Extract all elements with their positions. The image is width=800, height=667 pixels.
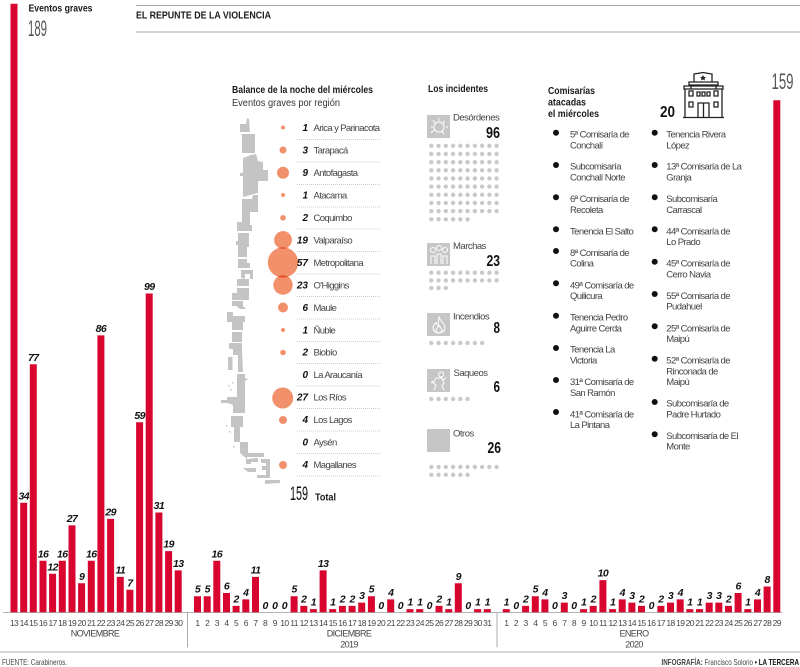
bars: diciembre: 1: [485, 597, 491, 609]
list column 1: San Ramón: [570, 388, 615, 399]
bars: noviembre: 18: [58, 618, 67, 628]
bars: diciembre: 6: [224, 580, 230, 592]
bars: diciembre: 0: [465, 600, 471, 612]
bars: diciembre: 31: [483, 618, 492, 628]
bars: enero: 9: [582, 618, 587, 628]
list column 2: Subcomisaría de El: [666, 431, 738, 442]
list column 2: Carrascal: [666, 205, 702, 216]
incident: marchas: 23: [486, 253, 500, 270]
bars: diciembre: 2: [205, 618, 210, 628]
bars: noviembre: 34: [18, 490, 30, 502]
bars: noviembre: 22: [97, 618, 106, 628]
incident: otros: 26: [488, 440, 501, 457]
list column 2: 25ª Comisaría de: [666, 323, 730, 334]
list column 1: Colina: [570, 259, 595, 270]
bars: enero: 1: [581, 597, 587, 609]
list column 1: Recoleta: [570, 205, 604, 216]
bars: noviembre: 11: [115, 564, 126, 576]
list column 1: Tenencia La: [570, 345, 616, 356]
incident: otros: Otros: [453, 428, 474, 440]
bars: enero: 0: [571, 600, 577, 612]
list column 1: Aguirre Cerda: [570, 323, 623, 334]
list column 2: 13ª Comisaría de La: [666, 162, 743, 173]
bars: enero: 10: [589, 618, 598, 628]
bars: diciembre: 14: [319, 618, 328, 628]
bars: diciembre: 10: [280, 618, 289, 628]
bars: diciembre: 9: [456, 571, 462, 583]
bars: enero: 5: [533, 584, 539, 596]
list column 2: Rinconada de: [666, 366, 718, 377]
bars: noviembre: 16: [86, 548, 97, 560]
list column 1: Quilicura: [570, 291, 603, 302]
bars: diciembre: 11: [251, 564, 261, 576]
bars: noviembre: 27: [66, 513, 79, 525]
bars: noviembre: 17: [48, 618, 58, 628]
bars: noviembre: 12: [47, 561, 59, 573]
bars: enero: 18: [666, 618, 675, 628]
bars: noviembre: 16: [38, 548, 49, 560]
bars: enero: 23: [715, 618, 724, 628]
list column 1: 31ª Comisaría de: [570, 377, 634, 388]
region list: 1: [302, 123, 308, 134]
bars: diciembre: 30: [473, 618, 483, 628]
list column 1: Conchalí Norte: [570, 173, 625, 184]
chart heading: eventos graves: Eventos graves: [28, 4, 93, 14]
list column 2: Monte: [666, 442, 690, 453]
region list: 4: [301, 415, 308, 426]
bars: diciembre: 9: [273, 618, 278, 628]
region list: 0: [302, 370, 308, 381]
bars: noviembre: 77: [28, 352, 40, 364]
bars: enero: 2: [590, 593, 597, 605]
incident: desórdenes: 96: [486, 125, 500, 142]
bars: noviembre: 16: [39, 618, 48, 628]
region list: 1: [302, 190, 308, 202]
comisarías heading: el miércoles: [548, 109, 599, 120]
incident: saqueos: 6: [494, 379, 500, 396]
bars: enero: 2: [657, 593, 664, 605]
list column 1: 5ª Comisaría de: [570, 129, 629, 140]
list column 1: Tenencia Pedro: [570, 312, 628, 323]
list column 2: Padre Hurtado: [666, 409, 721, 420]
bars: noviembre: 7: [127, 577, 134, 589]
bars: diciembre: 1: [407, 597, 413, 609]
bars: enero: 1: [504, 597, 510, 609]
bars: noviembre: 99: [144, 281, 155, 293]
region list: Metropolitana: [314, 258, 364, 269]
bars: enero: 20: [686, 618, 695, 628]
bars: noviembre: 20: [77, 618, 87, 628]
bars: noviembre: 19: [68, 618, 77, 628]
bars: noviembre: 27: [145, 618, 154, 628]
map of Chile: [221, 118, 280, 484]
incidents heading: Los incidentes: [428, 84, 488, 95]
incident: marchas: Marchas: [453, 241, 487, 252]
bars: enero: 1: [687, 597, 693, 609]
bars: noviembre: 9: [79, 571, 85, 583]
region list: O'Higgins: [314, 280, 350, 292]
bars: diciembre: 0: [262, 600, 268, 612]
panel: balance by region: [221, 85, 381, 505]
bars: enero: 4: [754, 587, 761, 599]
bars: diciembre: 5: [205, 584, 211, 596]
bars: noviembre: 29: [164, 618, 174, 628]
bars: diciembre: 15: [329, 618, 338, 628]
bars: noviembre: 31: [154, 500, 165, 512]
bars: enero: 3: [668, 590, 674, 602]
bars: noviembre: 86: [96, 323, 107, 335]
balance heading: Balance de la noche del miércoles: [232, 85, 373, 96]
list column 2: Maipú: [666, 377, 689, 388]
bars: diciembre: 0: [398, 600, 404, 612]
list column 2: Cerro Navia: [666, 269, 712, 280]
bars: diciembre: 6: [244, 618, 249, 628]
list column 2: 55ª Comisaría de: [666, 291, 730, 302]
bullets column 2: [652, 130, 658, 437]
region list: 1: [302, 326, 308, 336]
incident: saqueos: [427, 368, 500, 399]
list column 1: 6ª Comisaría de: [570, 194, 629, 205]
bars: diciembre: 24: [416, 618, 425, 628]
bars: noviembre: 13: [10, 618, 19, 628]
panel: los incidentes: [427, 84, 501, 475]
region list: Ñuble: [314, 326, 336, 336]
total: Total: [315, 492, 336, 504]
bars: noviembre: 28: [155, 618, 164, 628]
incident: incendios: [427, 312, 500, 343]
bars: diciembre: 1: [195, 618, 200, 628]
bars: diciembre: 23: [406, 618, 415, 628]
bars: enero: 4: [677, 587, 684, 599]
list column 1: 49ª Comisaría de: [570, 280, 634, 291]
bars: diciembre: 4: [242, 587, 249, 599]
bars: noviembre: 23: [106, 618, 116, 628]
balance heading: [232, 85, 373, 109]
bars: enero: 12: [608, 618, 618, 628]
bars: enero: 4: [533, 618, 538, 628]
bars: enero: 8: [572, 618, 577, 628]
bars: enero: 4: [619, 587, 626, 599]
list column 2: Maipú: [666, 334, 689, 345]
list column 1: Conchalí: [570, 140, 604, 151]
bars: diciembre: 16: [212, 548, 223, 560]
list column 1: Subcomisaría: [570, 162, 622, 173]
region list: 6: [302, 303, 308, 314]
bars: enero: ENERO: [619, 628, 649, 638]
bars: diciembre: 2: [232, 593, 239, 605]
list column 1: Tenencia El Salto: [570, 226, 634, 237]
total: 159: [290, 484, 308, 505]
bars: noviembre: [10, 4, 184, 638]
bars: enero: 6: [735, 580, 741, 592]
region list: Atacama: [314, 190, 348, 202]
bars: enero: 6: [553, 618, 558, 628]
region list: 2: [301, 348, 308, 358]
list column 2: 44ª Comisaría de: [666, 226, 730, 237]
bars: diciembre: 5: [291, 584, 297, 596]
region list: Valparaíso: [314, 236, 352, 246]
bars: diciembre: 1: [330, 597, 336, 609]
list column 2: Lo Prado: [666, 237, 700, 248]
region list: Magallanes: [314, 460, 357, 471]
bars: enero: 0: [649, 600, 655, 612]
bars: noviembre: NOVIEMBRE: [71, 628, 120, 638]
region list: Antofagasta: [314, 168, 359, 179]
bars: enero: 16: [647, 618, 656, 628]
bars: diciembre: 5: [369, 584, 375, 596]
bars: enero: 1: [504, 618, 509, 628]
bars: diciembre: 3: [215, 618, 220, 628]
bars: noviembre: 14: [20, 618, 29, 628]
bars: noviembre: 25: [126, 618, 135, 628]
region list: La Araucanía: [314, 370, 363, 381]
region list: 27: [296, 392, 308, 404]
bars: diciembre: 4: [387, 587, 394, 599]
bars: enero: 1: [610, 597, 616, 609]
bars: enero: 29: [773, 618, 782, 628]
bars: diciembre: [195, 548, 492, 649]
bars: diciembre: 5: [234, 618, 239, 628]
bars: diciembre: 20: [377, 618, 386, 628]
bars: enero: 3: [562, 590, 568, 602]
bars: enero: 26: [744, 618, 753, 628]
bars: diciembre: 2: [435, 593, 442, 605]
bars: noviembre: 21: [87, 618, 96, 628]
region list: [296, 123, 381, 471]
list column 2: Pudahuel: [666, 302, 702, 313]
bars: diciembre: 13: [318, 558, 329, 570]
region list: 2: [301, 213, 308, 224]
bars: noviembre: 29: [104, 506, 117, 518]
bars: enero: 7: [562, 618, 567, 628]
region list: 3: [302, 146, 308, 156]
bars: diciembre: 7: [253, 618, 258, 628]
bars: enero: 2: [725, 593, 732, 605]
bars: enero: 3: [707, 590, 713, 602]
bars: enero: 24: [724, 618, 733, 628]
region list: Aysén: [314, 438, 337, 448]
title: EL REPUNTE DE LA VIOLENCIA: [136, 10, 271, 22]
bars: diciembre: 12: [300, 618, 309, 628]
bars: diciembre: 27: [445, 618, 454, 628]
bars: enero: 1: [745, 597, 751, 609]
bars: diciembre: 1: [475, 597, 481, 609]
incident: saqueos: Saqueos: [454, 368, 488, 379]
region list: Biobío: [314, 348, 337, 358]
bars: enero: 14: [628, 618, 637, 628]
comisarías heading: [548, 86, 599, 120]
bars: diciembre: 4: [224, 618, 229, 628]
bars: diciembre: 22: [396, 618, 405, 628]
region list: 19: [297, 236, 308, 246]
bars: noviembre: 59: [134, 410, 146, 422]
incident: desórdenes: Desórdenes: [453, 112, 500, 124]
bars: enero: 15: [637, 618, 646, 628]
region list: 9: [302, 168, 308, 179]
bars: diciembre: 3: [359, 590, 365, 602]
list column 2: [666, 129, 743, 453]
list column 2: Tenencia Rivera: [666, 129, 727, 140]
bars: diciembre: 19: [367, 618, 376, 628]
incident: desórdenes: [427, 112, 500, 219]
bars: enero: 22: [705, 618, 714, 628]
list column 1: 41ª Comisaría de: [570, 409, 634, 420]
bars: noviembre: 26: [135, 618, 145, 628]
incident: otros: [427, 428, 501, 475]
bars: diciembre: 1: [311, 597, 317, 609]
bars: enero: 1: [697, 597, 703, 609]
panel: comisarías atacadas: [548, 72, 743, 453]
bars: enero: 2: [638, 593, 645, 605]
bars: enero: 25: [734, 618, 743, 628]
bars: enero: 2020: [625, 639, 643, 649]
bars: enero: 5: [543, 618, 548, 628]
region list: Coquimbo: [314, 213, 352, 224]
bars: noviembre: 19: [163, 539, 175, 551]
incident: marchas: [427, 241, 500, 288]
bullets column 1: [553, 130, 559, 415]
bars: noviembre: 15: [29, 618, 38, 628]
bars: diciembre: 29: [464, 618, 473, 628]
list column 2: Subcomisaría: [666, 194, 718, 205]
bars: enero: 8: [764, 574, 770, 586]
incident: incendios: Incendios: [453, 312, 490, 322]
bars: diciembre: 21: [387, 618, 396, 628]
bars: diciembre: 26: [435, 618, 444, 628]
bars: diciembre: 2019: [340, 639, 358, 649]
region list: Maule: [314, 303, 337, 314]
bars: diciembre: 28: [454, 618, 463, 628]
list column 1: 8ª Comisaría de: [570, 248, 629, 259]
list column 2: López: [666, 140, 690, 151]
bars: enero: 27: [753, 618, 762, 628]
list column 2: Granja: [666, 173, 693, 184]
list column 2: 45ª Comisaría de: [666, 259, 730, 270]
bars: noviembre: 24: [116, 618, 125, 628]
bubbles by region: [268, 126, 298, 469]
peak value 189: 189: [28, 16, 47, 41]
bars: diciembre: 0: [378, 600, 384, 612]
bars: enero: 28: [763, 618, 772, 628]
bars: diciembre: 1: [417, 597, 423, 609]
source: FUENTE: Carabineros.: [2, 657, 67, 667]
region list: 4: [301, 460, 308, 471]
bars: diciembre: 16: [338, 618, 347, 628]
region list: Arica y Parinacota: [314, 123, 381, 134]
region list: 23: [296, 280, 308, 292]
bars: diciembre: 13: [309, 618, 318, 628]
bars: enero: 19: [676, 618, 685, 628]
bars: diciembre: 18: [358, 618, 367, 628]
bars: diciembre: 2: [300, 593, 307, 605]
bars: enero: 3: [629, 590, 635, 602]
bars: noviembre: 30: [174, 618, 183, 628]
bars: diciembre: 17: [348, 618, 357, 628]
bars: enero: 21: [695, 618, 704, 628]
bars: diciembre: 5: [195, 584, 201, 596]
bars: diciembre: 0: [427, 600, 433, 612]
bars: diciembre: 2: [339, 593, 346, 605]
bars: enero: 10: [598, 568, 609, 580]
bars: diciembre: 0: [272, 600, 278, 612]
bars: enero: 13: [618, 618, 627, 628]
bars: diciembre: 1: [446, 597, 452, 609]
icon: police station: [683, 72, 724, 118]
bars: enero: 2: [522, 593, 529, 605]
total: [290, 484, 336, 505]
region list: Los Ríos: [314, 392, 347, 404]
bars: enero: 17: [657, 618, 666, 628]
region list: Los Lagos: [314, 415, 353, 426]
list column 1: La Pintana: [570, 420, 611, 431]
bars: noviembre: 16: [57, 548, 68, 560]
bars: enero: 3: [524, 618, 529, 628]
count 20: 20: [660, 104, 675, 121]
bars: diciembre: DICIEMBRE: [327, 628, 372, 638]
bars: enero: 11: [599, 618, 608, 628]
bars: enero: 2: [514, 618, 519, 628]
bars: enero: 3: [716, 590, 722, 602]
region list: 0: [302, 438, 308, 448]
bars: diciembre: 25: [425, 618, 434, 628]
bars: diciembre: 8: [263, 618, 268, 628]
bars: enero: 0: [513, 600, 519, 612]
balance heading: Eventos graves por región: [232, 98, 340, 109]
bars: enero: 0: [552, 600, 558, 612]
comisarías heading: atacadas: [548, 98, 586, 108]
incident: incendios: 8: [494, 320, 500, 337]
bars: diciembre: 0: [282, 600, 288, 612]
bars: diciembre: 2: [348, 593, 355, 605]
comisarías heading: Comisarías: [548, 86, 595, 97]
list column 2: 52ª Comisaría de: [666, 356, 730, 367]
list column 1: Victoria: [570, 356, 598, 367]
list column 2: Subcomisaría de: [666, 399, 729, 410]
region list: Tarapacá: [314, 146, 349, 156]
bars: diciembre: 11: [290, 618, 299, 628]
bars: enero: [504, 100, 782, 649]
bars: enero: 4: [541, 587, 548, 599]
region list: 57: [297, 258, 308, 269]
list column 1: [570, 129, 634, 431]
bars: noviembre: 13: [173, 558, 184, 570]
